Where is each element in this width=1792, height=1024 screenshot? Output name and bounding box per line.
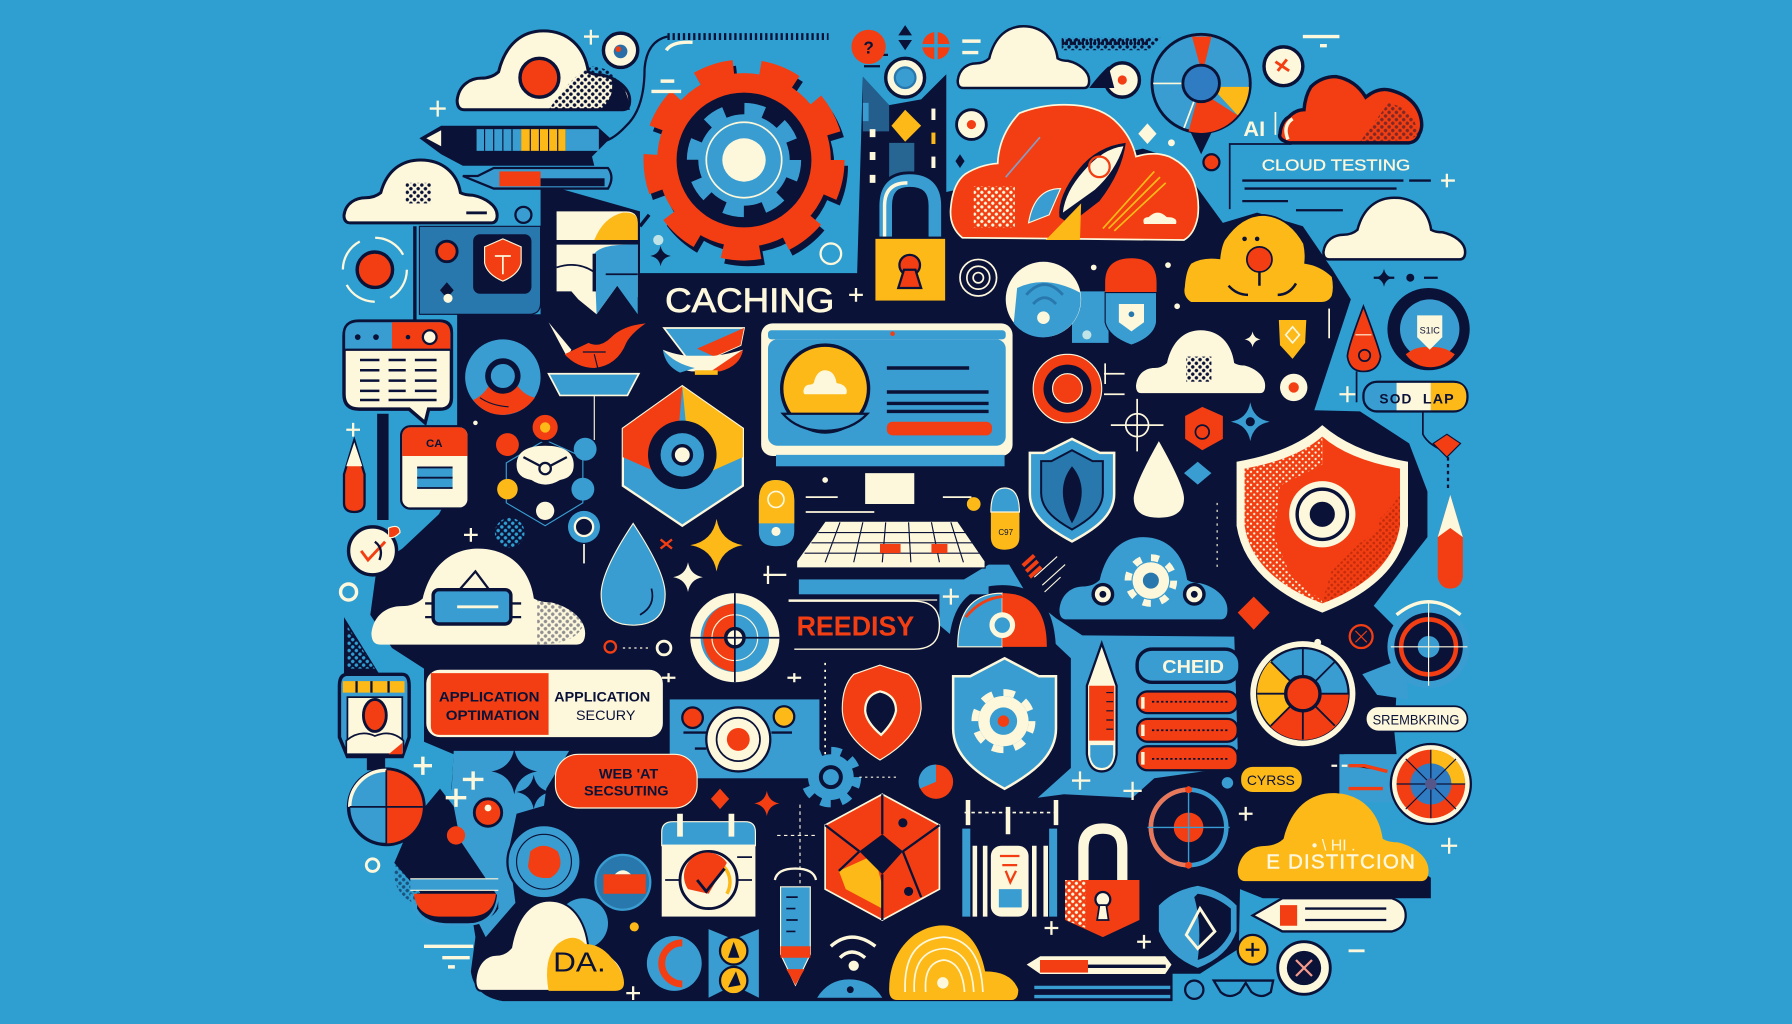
label: redisy [789,601,939,649]
icon: yellow padlock [874,181,946,302]
red ring icon [1033,354,1125,423]
blue cut-out panels [451,291,1408,937]
shield with gear [953,658,1056,789]
target icon near drop [464,511,600,563]
cloud circle [595,855,650,910]
yellow pills [759,480,1019,550]
pencil: red and blue [463,168,611,189]
target circle lower [1145,784,1232,871]
srembkring pill: SREMBKRING [1373,713,1459,729]
lower left accents [366,859,640,1000]
red ball [474,799,502,826]
red rocket cloud [951,105,1198,240]
red padlock [1065,829,1139,937]
blue water drop [601,523,665,625]
keyboard [789,521,989,600]
cloud: top centre [958,26,1089,88]
application label box: APPLICATION [439,690,539,706]
web pill: WEB 'AT [599,766,659,782]
shield pill [1082,258,1180,345]
cream drop [1134,441,1217,571]
cheid stack [1137,649,1240,770]
application label box [425,669,664,738]
calendar with check [662,805,818,917]
sod lap pill [1339,382,1467,491]
cloud testing text block: CLOUD TESTING [1262,157,1410,174]
server rack [962,800,1057,917]
pie chart with pin [1152,34,1250,170]
heading: caching: CACHING [665,282,834,320]
cloud testing text block [1230,144,1431,210]
cream and yellow cloud DA: DA. [553,946,606,977]
stars [661,519,786,592]
red C circle [629,921,702,991]
yellow cloud with text: E DISTITCION [1266,851,1415,874]
panel: shield monitor [415,207,541,343]
tower [863,77,935,183]
cream and yellow cloud DA [475,898,624,991]
cyrss pill [1222,767,1302,792]
application label box: APPLICATION [554,690,650,706]
bottom right icons [1185,935,1365,999]
portrait badge [339,674,409,770]
wifi and dome [817,937,882,998]
monitor stand [806,473,981,512]
gear panel accents [650,42,888,266]
AI label [1243,112,1275,141]
disc icon [465,339,541,415]
srembkring pill [1366,706,1467,731]
small red circle [1089,63,1139,97]
yellow cloud [1184,215,1334,303]
small circle under cloud [955,110,1175,168]
navy background blob [344,74,1431,1001]
AI label: AI [1243,116,1265,141]
red pencil right and diamond [1238,495,1463,646]
blue orange badge [507,825,581,898]
yellow fingerprint cloud [889,925,1018,1000]
application label box: OPTIMATION [446,708,539,724]
small pie and blue gear [806,752,953,802]
application label box: SECURY [576,708,636,724]
cream cloud centre right [1136,330,1265,393]
yellow tag [1245,309,1329,359]
banner with badges [709,929,759,998]
spiral and wifi circle [960,259,1081,337]
check badge [349,526,400,575]
sod lap pill: SOD [1379,391,1413,406]
red map pin shield [842,665,921,760]
wheel chart [1250,641,1355,746]
cloud: device [371,549,585,645]
red cloud top right [1280,77,1422,143]
yellow cloud with text: • \ HI . [1312,837,1356,854]
small badge circle [1264,37,1339,86]
red pencil [1087,643,1117,771]
label: redisy: REEDISY [797,610,914,641]
ruler line and connector [600,37,829,142]
hexagon icon [623,386,743,526]
browser window list [344,321,451,423]
striped tag [1023,555,1065,592]
cyrss pill: CYRSS [1247,773,1295,789]
panel: target circle [662,663,825,778]
calendar CA: CA [426,438,443,450]
cream cloud right [1323,198,1465,287]
red drop [1347,306,1381,402]
portrait circle [1387,288,1470,370]
small target circle [603,33,638,67]
colour radar [1339,744,1471,824]
red white circle chart [349,769,424,845]
node crosshair hex star [1111,374,1307,451]
red bird icon [549,322,646,368]
lamp icon [394,826,498,925]
top small icons: ? [863,38,874,58]
web pill [555,754,779,816]
red and blue dome icon [949,585,1056,654]
target ring icon [343,238,407,302]
web pill: SECSUTING [584,783,669,799]
top small icons [851,25,981,97]
test tube [775,869,816,985]
big red shield [1237,425,1408,613]
target chart [605,593,779,682]
cheid stack: CHEID [1162,656,1224,677]
target right [1350,600,1470,688]
pencil: navy striped [419,126,610,166]
calendar CA [401,426,469,509]
pencil lower right [1253,898,1406,931]
bowls icon [663,328,744,375]
small blue shield [1030,439,1114,541]
halftone triangle [347,626,375,669]
red honeycomb hexagon [825,794,939,920]
cloud: top left with red dot [457,31,630,110]
monitor and screen [761,323,1013,466]
icon: big red gear [651,67,840,258]
cloud: left with dot grid [344,160,497,223]
portrait circle: S1IC [1420,326,1440,336]
navy sparkles and plus signs [414,749,551,809]
network node icon [473,414,597,526]
sod lap pill: LAP [1423,391,1455,407]
plus signs [430,30,1457,949]
yellow pills: C97 [998,528,1014,537]
document and fold icon [557,211,649,314]
dark shield [1158,885,1238,969]
yellow cloud with text [1238,793,1429,881]
red pencil left [344,423,365,512]
blue gear cloud [1059,537,1227,619]
ring accent [341,584,357,600]
dot grid bar [1062,38,1161,50]
pencil bottom [1025,955,1173,997]
trapezoid stand [549,374,639,440]
